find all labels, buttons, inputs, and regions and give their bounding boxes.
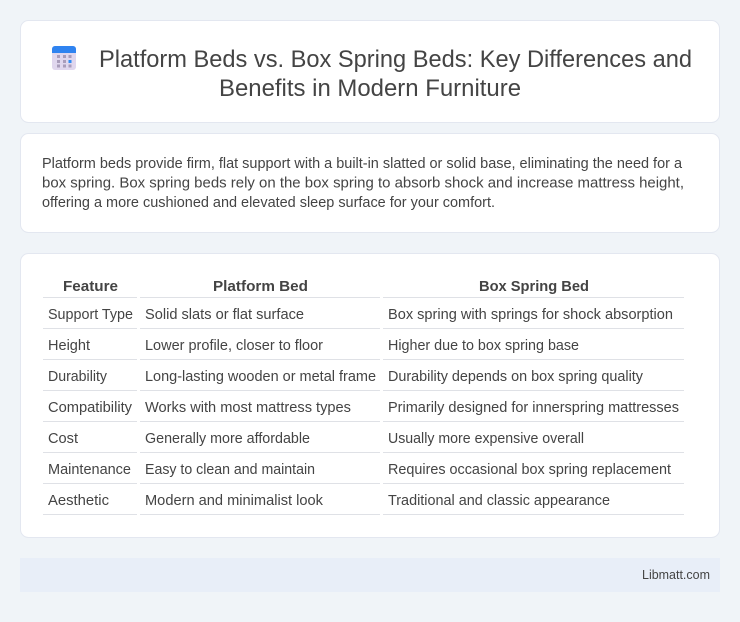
table row: compatibility (48, 400, 679, 416)
title: Benefits in Modern Furniture (219, 75, 521, 102)
table header row: Box Spring Bed (479, 278, 589, 295)
table header row (63, 278, 589, 295)
table header row: Feature (63, 278, 118, 295)
table row: aesthetic: Aesthetic (48, 493, 109, 509)
title (99, 46, 692, 102)
table row: support type (48, 307, 673, 323)
table header row: Platform Bed (213, 278, 308, 295)
table row: durability (48, 369, 644, 385)
table row: support type: Support Type (48, 307, 133, 323)
title: Platform Beds vs. Box Spring Beds: Key Differences and (99, 46, 692, 73)
table row: cost: Generally more affordable (145, 431, 310, 447)
table row: durability: Durability (48, 369, 108, 385)
table row: compatibility: Works with most mattress types (145, 400, 351, 416)
table row: aesthetic (48, 493, 610, 509)
table row: height: Higher due to box spring base (388, 338, 579, 354)
table row: cost: Cost (48, 431, 78, 447)
footer (20, 558, 720, 592)
table row: aesthetic: Modern and minimalist look (145, 493, 324, 509)
table row: support type: Box spring with springs for shock absorption (388, 307, 673, 323)
table row: compatibility: Primarily designed for innerspring mattresses (388, 400, 679, 416)
footer text: source: Libmatt.com (642, 568, 710, 582)
panel: title card (20, 20, 720, 122)
table row: height: Height (48, 338, 90, 354)
text block: intro paragraph: box spring. Box spring beds rely on the box spring to absorb shock and increase mattress height, (42, 176, 684, 192)
table row: compatibility: Compatibility (48, 400, 133, 416)
icon: calendar (52, 46, 76, 70)
table row: maintenance: Requires occasional box spring replacement (388, 462, 671, 478)
table row: height: Lower profile, closer to floor (145, 338, 323, 354)
table row: support type: Solid slats or flat surface (145, 307, 304, 323)
panel: intro text (20, 134, 720, 232)
panel: comparison table (20, 254, 720, 538)
table row: maintenance (48, 462, 671, 478)
table row: maintenance: Maintenance (48, 462, 131, 478)
table row: cost: Usually more expensive overall (388, 431, 584, 447)
text block: intro paragraph: offering a more cushioned and elevated sleep surface for your comfort. (42, 195, 495, 211)
table row: durability: Durability depends on box spring quality (388, 369, 644, 385)
table row: cost (48, 431, 584, 447)
table row: durability: Long-lasting wooden or metal frame (145, 369, 376, 385)
text block: intro paragraph: Platform beds provide firm, flat support with a built-in slatted or solid base, eliminating the need for a (42, 156, 682, 172)
text block: intro paragraph (42, 156, 684, 211)
table row: aesthetic: Traditional and classic appearance (388, 493, 610, 509)
table row: height (48, 338, 579, 354)
table row: maintenance: Easy to clean and maintain (145, 462, 315, 478)
